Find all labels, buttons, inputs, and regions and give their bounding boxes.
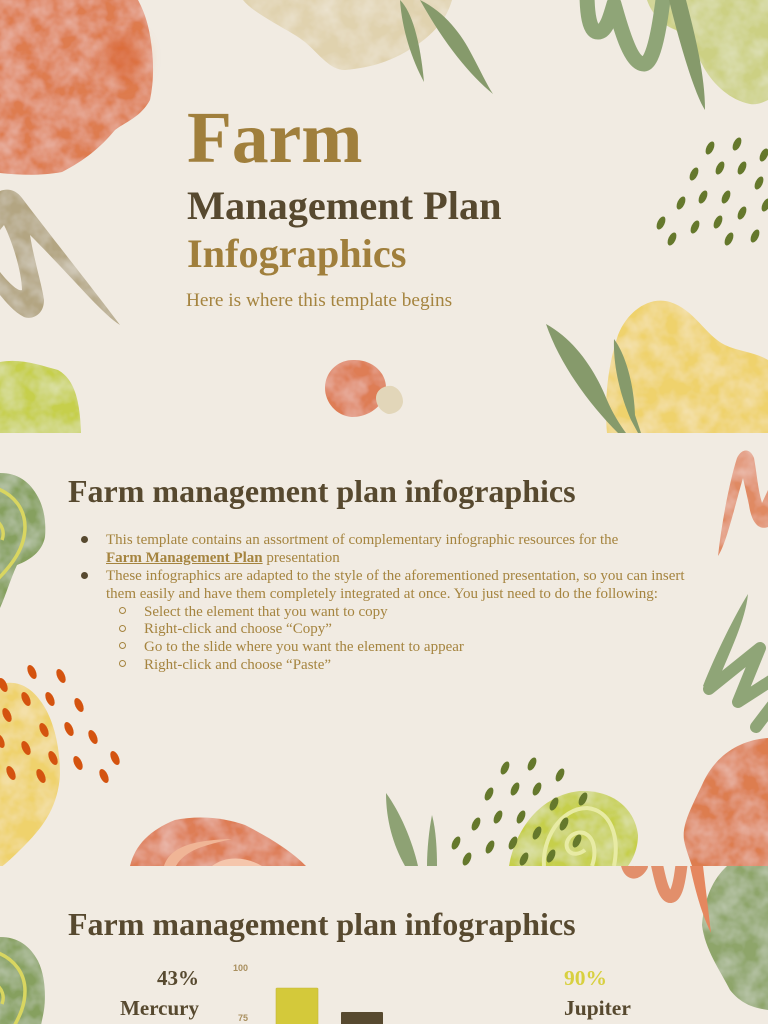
- slide 2 heading: Farm management plan infographics: [68, 473, 576, 509]
- squiggle: orange right: [718, 450, 768, 556]
- blob: green top right: [702, 866, 768, 1010]
- axis label 100: 100: [233, 963, 248, 973]
- blob: beige top: [243, 0, 452, 70]
- sub-bullet 4: [119, 660, 126, 667]
- blob: small orange circle: [325, 360, 386, 417]
- blob: pale green top right: [647, 0, 768, 104]
- stat: Mercury 43%: [120, 966, 199, 1020]
- sub-bullet 1: [119, 607, 126, 614]
- blob: orange bottom with stripes: [130, 818, 306, 866]
- bullet 2: [81, 572, 88, 579]
- leaves: bottom centre: [386, 793, 437, 866]
- blob: lime spiral: [509, 791, 638, 866]
- blob: green spiral left: [0, 937, 45, 1024]
- bar chart: [276, 988, 383, 1024]
- slide 3 heading: Farm management plan infographics: [68, 906, 576, 942]
- blob: yellow left: [0, 683, 60, 868]
- blob: large orange: [0, 0, 153, 175]
- line 3: These infographics are adapted to the style of the aforementioned presentation, so you can insert: [106, 568, 685, 584]
- step 1: Select the element that you want to copy: [144, 604, 388, 620]
- dots: green grains bottom: [450, 756, 589, 867]
- slide 3 artwork: [0, 860, 768, 1024]
- dots: green grains top right: [655, 136, 768, 247]
- stat: Mercury 43%: 43%: [157, 966, 199, 990]
- squiggle: green right: [709, 648, 768, 727]
- dots: orange grains: [0, 664, 122, 784]
- title: Farm: Farm: [187, 97, 362, 178]
- blob: green spiral left: [0, 473, 45, 608]
- blob: small beige circle: [376, 386, 403, 414]
- bar: dark: [341, 1012, 383, 1024]
- stat: Jupiter 90%: [564, 966, 631, 1020]
- step 2: Right-click and choose “Copy”: [144, 621, 332, 637]
- step 3: Go to the slide where you want the element to appear: [144, 639, 464, 655]
- line 2: Farm Management Plan presentation: [106, 550, 340, 566]
- blob: orange right: [684, 738, 768, 866]
- slide 2 artwork: [0, 450, 768, 868]
- leaves: top centre: [400, 0, 493, 94]
- blob: yellow bottom right: [606, 301, 768, 433]
- sub-bullet 2: [119, 625, 126, 632]
- heading: Management Plan: Management Plan: [187, 183, 502, 228]
- heading: Infographics: Infographics: [187, 231, 406, 276]
- bullet 1: [81, 536, 88, 543]
- brown squiggle left: [0, 190, 120, 325]
- slide 1 artwork: [0, 0, 768, 433]
- stat: Mercury 43%: Mercury: [120, 996, 199, 1020]
- tip: green squiggle: [703, 594, 748, 692]
- step 4: Right-click and choose “Paste”: [144, 657, 331, 673]
- line 1: This template contains an assortment of complementary infographic resources for the: [106, 532, 618, 548]
- leaves: bottom right: [546, 324, 641, 433]
- stat: Jupiter 90%: Jupiter: [564, 996, 631, 1020]
- blob: lime bottom left: [0, 361, 81, 433]
- line 4: them easily and have them completely integrated at once. You just need to do the following:: [106, 586, 658, 602]
- stat: Jupiter 90%: 90%: [564, 966, 607, 990]
- bar: yellow: [276, 988, 318, 1024]
- tail: green squiggle: [669, 0, 705, 110]
- squiggle: green top right: [587, 0, 664, 64]
- sub-bullet 3: [119, 642, 126, 649]
- squiggle: orange top right: [626, 860, 711, 933]
- axis label 75: 75: [238, 1013, 248, 1023]
- subtitle: Here is where this template begins: [186, 290, 452, 311]
